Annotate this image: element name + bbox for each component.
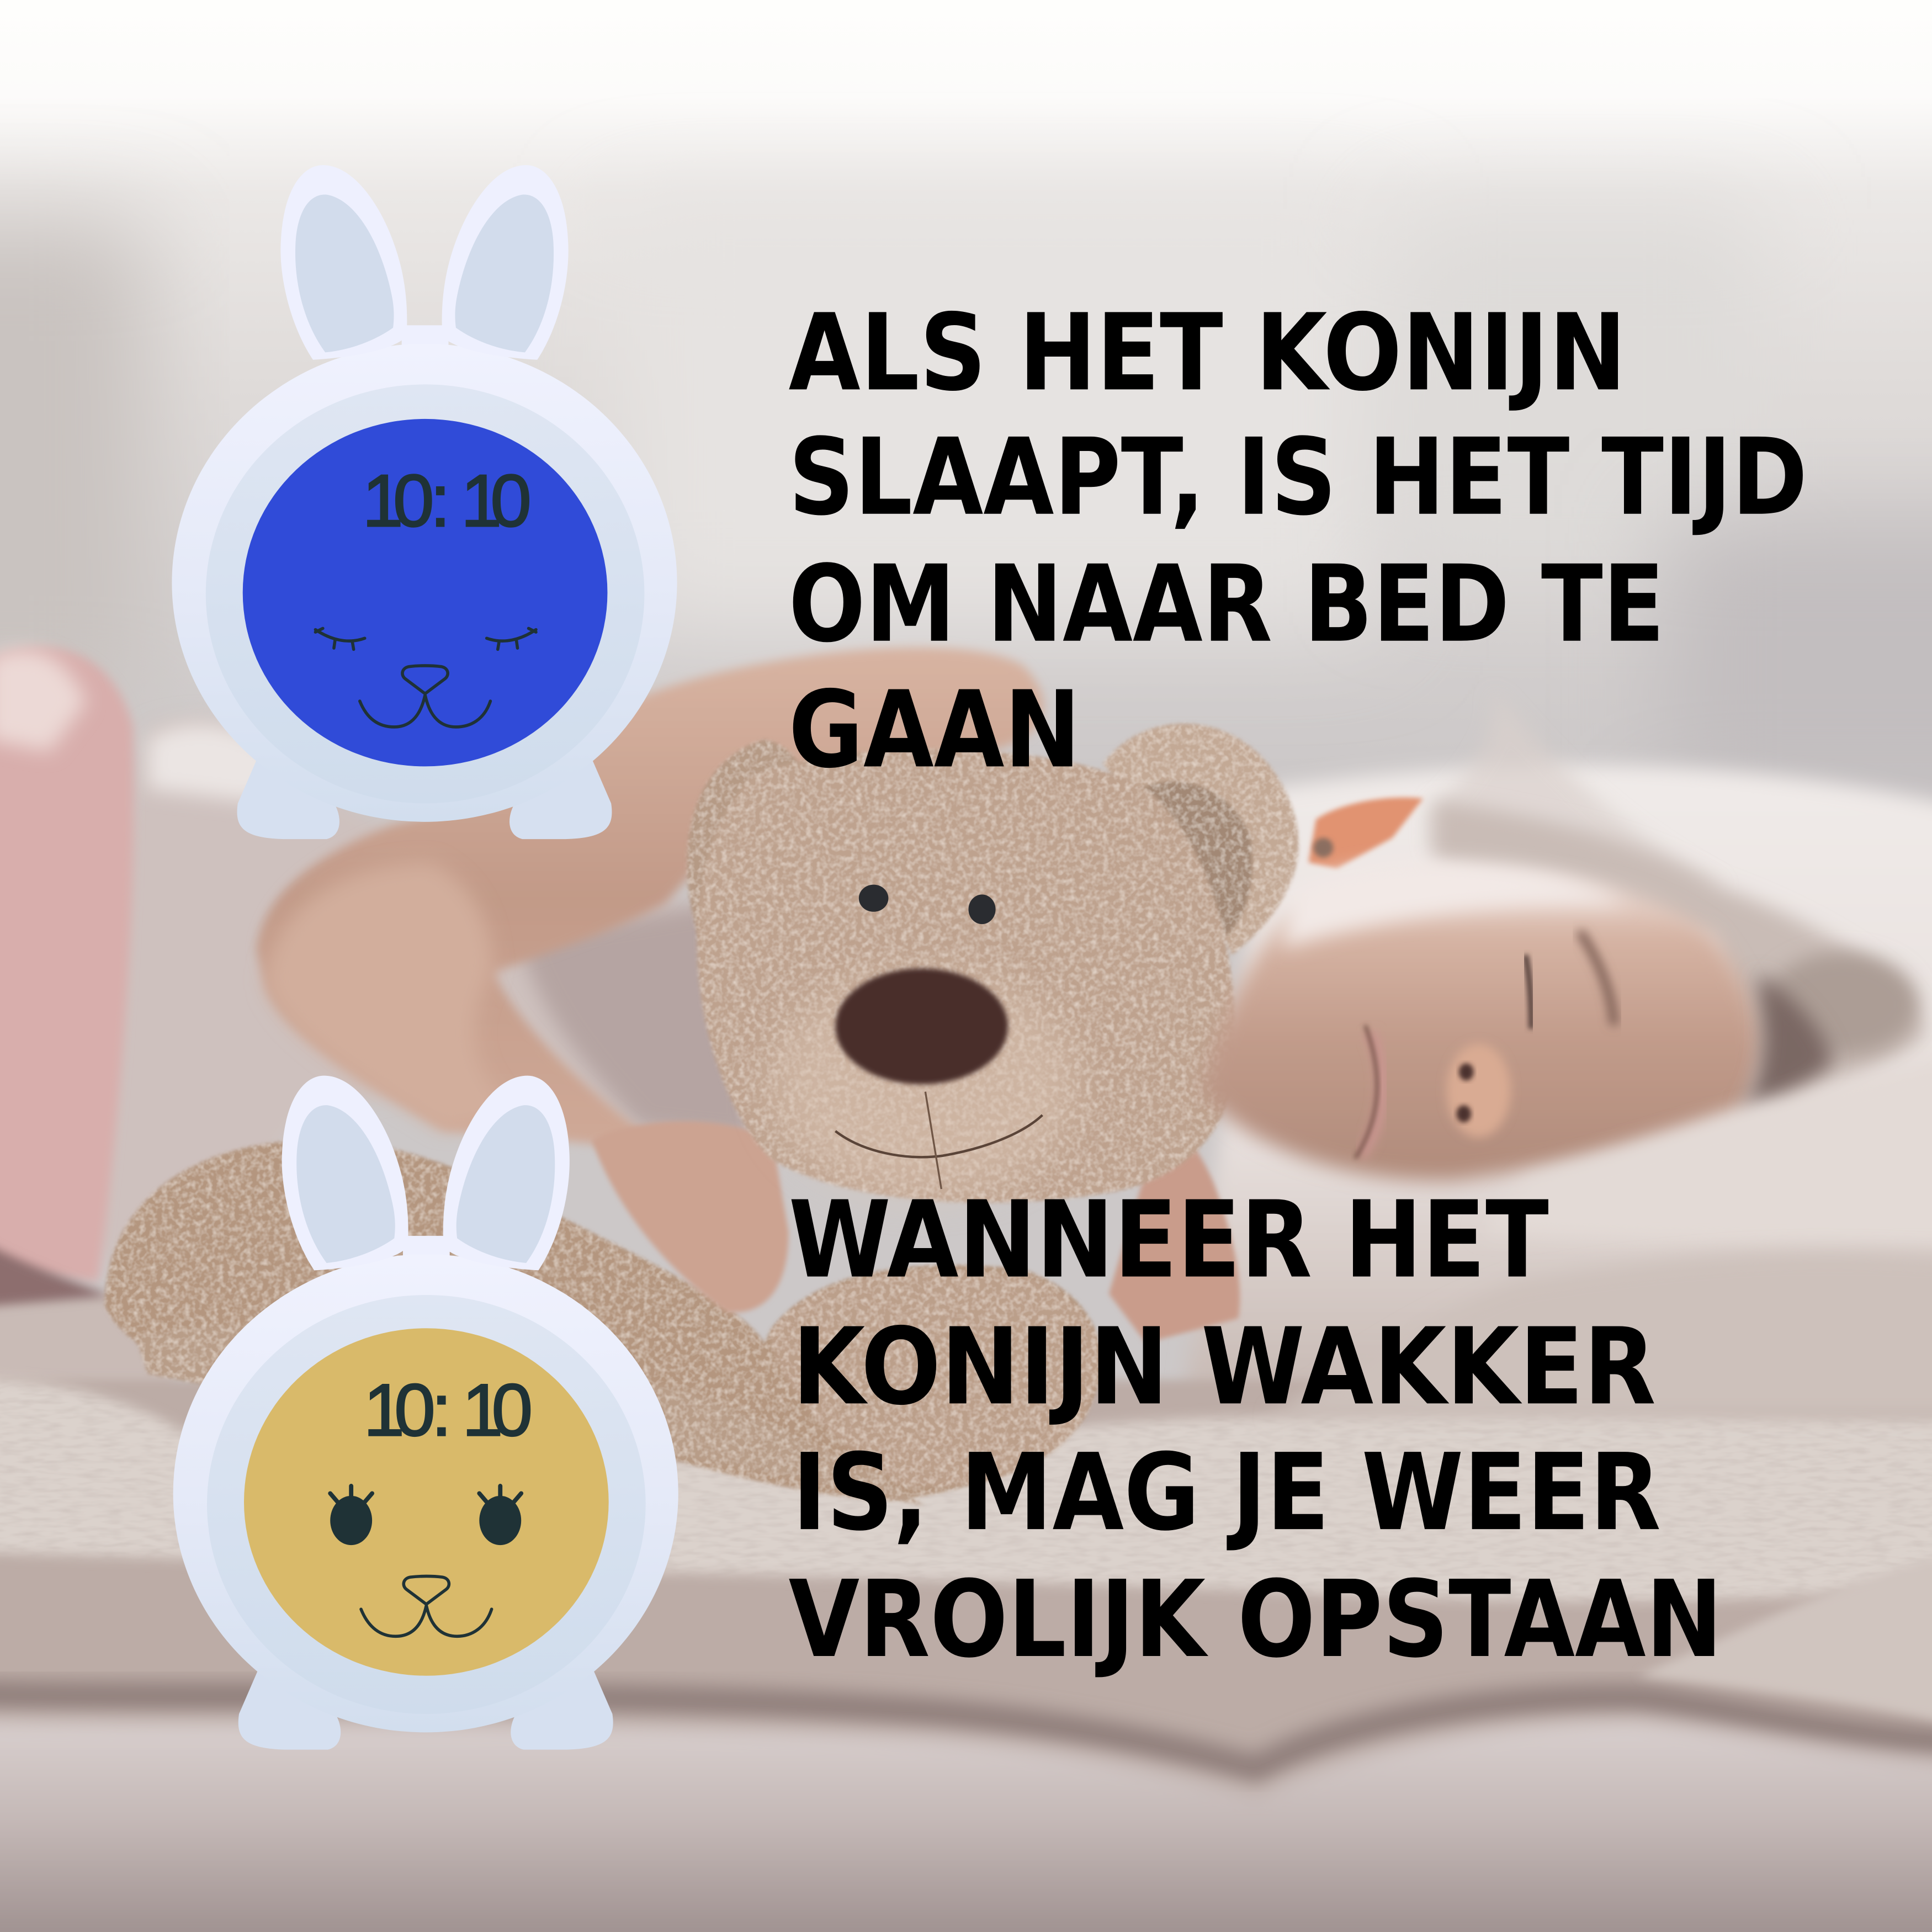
inner ring (206, 384, 644, 803)
dark hair edge (1740, 973, 1833, 1111)
text block: wake-up message: KONIJN WAKKER (792, 1305, 1656, 1429)
knitted top (0, 1378, 1932, 1602)
mouth (1355, 1025, 1382, 1158)
bear face (697, 749, 1235, 1203)
rabbit ears (282, 1076, 570, 1270)
hair clip (1309, 798, 1423, 869)
dark fold (0, 1694, 1932, 1769)
inner ring (207, 1295, 646, 1714)
closed eye (1525, 955, 1532, 1029)
child's arms (256, 647, 1043, 1146)
text block: wake-up message (789, 1179, 1723, 1681)
blanket (0, 1294, 1932, 1932)
bear eyes (859, 885, 996, 924)
nose (1447, 1044, 1511, 1137)
bear muzzle (770, 973, 1078, 1195)
bear seam (925, 1092, 941, 1189)
text block: wake-up message: VROLIJK OPSTAAN (789, 1558, 1723, 1681)
blanket base (0, 1380, 1932, 1932)
bear ears (687, 724, 1298, 955)
pillow lower shade (1269, 1252, 1932, 1417)
forehead highlight (1281, 861, 1626, 949)
text block: bedtime message: OM NAAR BED TE (789, 543, 1665, 666)
time display: 10:10 (363, 1369, 533, 1451)
face (1201, 873, 1760, 1181)
text block: wake-up message: IS, MAG JE WEER (792, 1431, 1661, 1554)
teddy bear plush body (105, 1140, 1101, 1506)
child's grey shirt (74, 718, 752, 1306)
bear nose (835, 968, 1008, 1084)
right fold (1639, 1552, 1932, 1725)
text block: wake-up message: WANNEER HET (789, 1179, 1549, 1302)
pink sleeve (0, 646, 134, 1306)
nose and smile (360, 666, 490, 727)
far hair (1766, 952, 1918, 1056)
clock body (173, 1254, 678, 1732)
hair wisps (1429, 690, 1725, 912)
clock: sleeping rabbit (172, 165, 677, 839)
top connector (403, 1236, 450, 1265)
yellow screen (244, 1328, 609, 1676)
rabbit feet (237, 758, 612, 839)
teddy bear head (687, 724, 1298, 1203)
left mattress (0, 1294, 172, 1405)
rabbit ears (280, 165, 569, 360)
sleeping eyes (315, 628, 536, 649)
open eyes (330, 1486, 521, 1545)
top connector (402, 325, 448, 355)
text block: bedtime message: ALS HET KONIJN (789, 291, 1626, 415)
child's head (1201, 690, 1932, 1417)
rabbit feet (238, 1668, 613, 1750)
pillow (1183, 765, 1932, 1405)
text block: bedtime message: GAAN (789, 668, 1081, 792)
pillow fold over face (1479, 1053, 1932, 1244)
time display: 10:10 (362, 460, 532, 542)
bear mouth (835, 1115, 1042, 1157)
text block: bedtime message (789, 291, 1808, 792)
nose and smile (361, 1576, 492, 1636)
clock body (172, 344, 677, 822)
clock: awake rabbit (173, 1076, 678, 1750)
hair (1434, 801, 1925, 1109)
soft bottom sheet (0, 1720, 1932, 1932)
eyebrow (1580, 932, 1614, 1025)
blue screen (243, 419, 607, 766)
child's hands (591, 1113, 1240, 1343)
